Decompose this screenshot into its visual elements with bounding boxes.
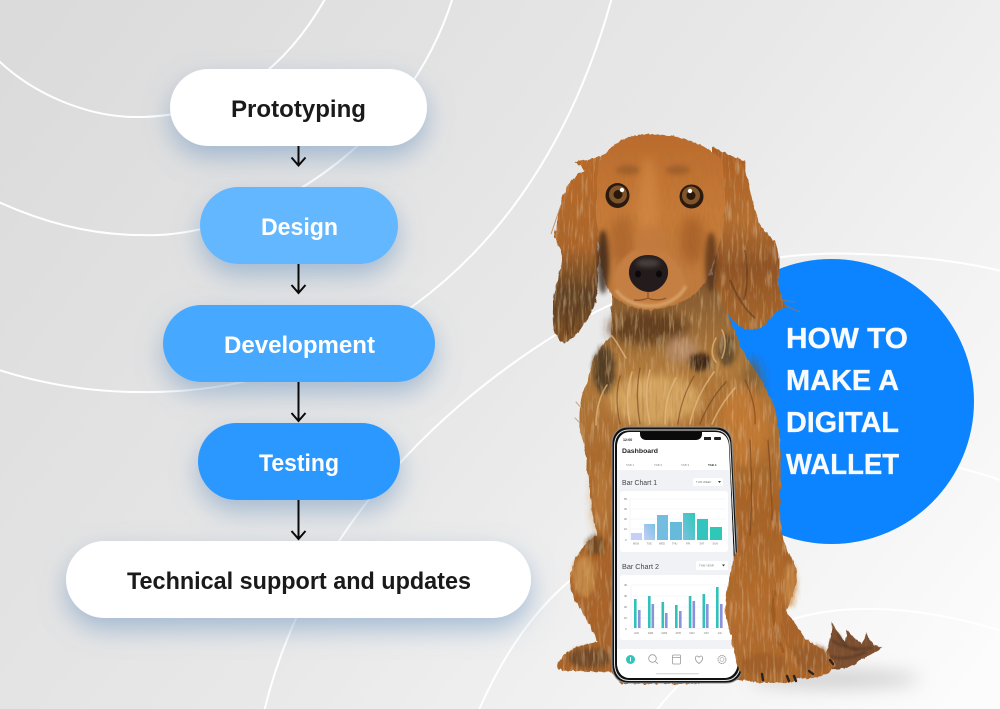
right ear [712, 146, 786, 330]
dog: tail [824, 622, 882, 669]
blue circle [689, 259, 974, 544]
neck shading [608, 311, 688, 345]
phone bezel highlight [614, 430, 740, 680]
step: technical support and updates: Technical support and updates [127, 568, 471, 595]
step: testing: Testing [259, 450, 339, 477]
bar chart 2: 2K [624, 605, 628, 609]
bar chart 1: 0 [625, 538, 627, 542]
dropdown this week [693, 478, 723, 486]
bar chart 1: 3K [624, 507, 628, 511]
bar chart 1: 2K [624, 517, 628, 521]
right eye [680, 184, 704, 208]
bar chart 1 heading: Bar Chart 1 [622, 480, 657, 487]
bar chart 2: MAR [662, 631, 667, 635]
dog: front leg [725, 535, 799, 683]
step: design [200, 187, 398, 264]
step: technical support and updates [66, 541, 531, 618]
bar chart 1: WED [659, 542, 665, 546]
hind upper leg [783, 563, 797, 607]
step: development [163, 305, 435, 382]
notch [640, 432, 702, 440]
nose [629, 255, 668, 292]
grey content area [617, 470, 734, 649]
cheek shading [610, 216, 634, 264]
title: how to make a digital wallet: WALLET [786, 449, 899, 481]
dropdown this year: THIS YEAR [699, 564, 714, 568]
right shoulder [718, 334, 736, 366]
bar chart 2: JUN [704, 631, 709, 635]
mouth [634, 292, 666, 300]
step: development: Development [224, 332, 375, 359]
title: how to make a digital wallet: DIGITAL [786, 407, 899, 439]
head shape [596, 134, 725, 310]
step: prototyping: Prototyping [231, 96, 366, 123]
bar chart 2 [620, 575, 735, 640]
phone [610, 427, 745, 683]
bar chart 1: SAT [700, 542, 705, 546]
hind paw right [786, 645, 830, 671]
dog: body [557, 275, 835, 684]
ear dark strands [566, 250, 755, 335]
bar chart 2: 0 [625, 627, 627, 631]
tabs: TAB 1 [626, 463, 634, 467]
bar chart 2: JUL [718, 631, 723, 635]
bar chart 1: MON [633, 542, 639, 546]
leg shadow line [773, 590, 784, 652]
neck dark patch [689, 353, 711, 371]
muzzle [614, 245, 686, 308]
bar chart 1: THU [672, 542, 677, 546]
tabs [626, 464, 716, 466]
paw shading [740, 653, 788, 675]
left ear [553, 150, 612, 343]
bar chart 2: FEB [648, 631, 653, 635]
step: prototyping [170, 69, 427, 146]
bar chart 1: TUE [646, 542, 652, 546]
bar chart 1 [620, 491, 728, 552]
chest highlights [609, 374, 701, 426]
tabs: TAB 2 [654, 463, 662, 467]
bar chart 1: 1K [624, 527, 628, 531]
status bar: 12:00 [623, 438, 632, 442]
neck pink centre [665, 336, 699, 364]
dashboard heading: Dashboard [622, 448, 658, 455]
arrow: design to development [292, 264, 306, 293]
bar chart 2: MAY [690, 631, 695, 635]
bar chart 1: 5K [624, 497, 628, 501]
ground shadow [750, 671, 920, 687]
phone frame [612, 427, 743, 683]
bar chart 2: 4K [624, 583, 628, 587]
arrow: prototyping to design [292, 146, 306, 166]
bar chart 2: 3K [624, 594, 628, 598]
left shoulder [593, 346, 615, 394]
dog: chest hair strands [575, 330, 772, 535]
dog: head and ears [551, 134, 800, 343]
dropdown this year [696, 561, 728, 570]
arrow: testing to technical support [292, 500, 306, 539]
facial shading [597, 230, 609, 294]
step: design: Design [261, 214, 338, 241]
bottom navigation [617, 654, 738, 678]
dropdown this week: THIS WEEK [696, 480, 712, 484]
bar chart 2: 1K [624, 616, 628, 620]
title: how to make a digital wallet: MAKE A [786, 365, 899, 397]
bar chart 1: SUN [712, 542, 718, 546]
phone screen [617, 432, 738, 678]
title: how to make a digital wallet: HOW TO [786, 323, 908, 355]
ear wisps [551, 205, 800, 312]
step: testing [198, 423, 400, 500]
left eye [606, 183, 630, 208]
bar chart 1: FRI [686, 542, 690, 546]
dog: claws [762, 660, 833, 681]
tabs: TAB 3 [681, 463, 689, 467]
tabs: TAB 4 [708, 463, 717, 467]
paw left [568, 648, 612, 668]
title: how to make a digital wallet [786, 323, 908, 481]
bar chart 2 heading: Bar Chart 2 [622, 564, 659, 571]
bar chart 2: APR [676, 631, 681, 635]
arrow: development to testing [292, 382, 306, 421]
bar chart 2: JAN [634, 631, 639, 635]
hind leg left [573, 555, 595, 597]
